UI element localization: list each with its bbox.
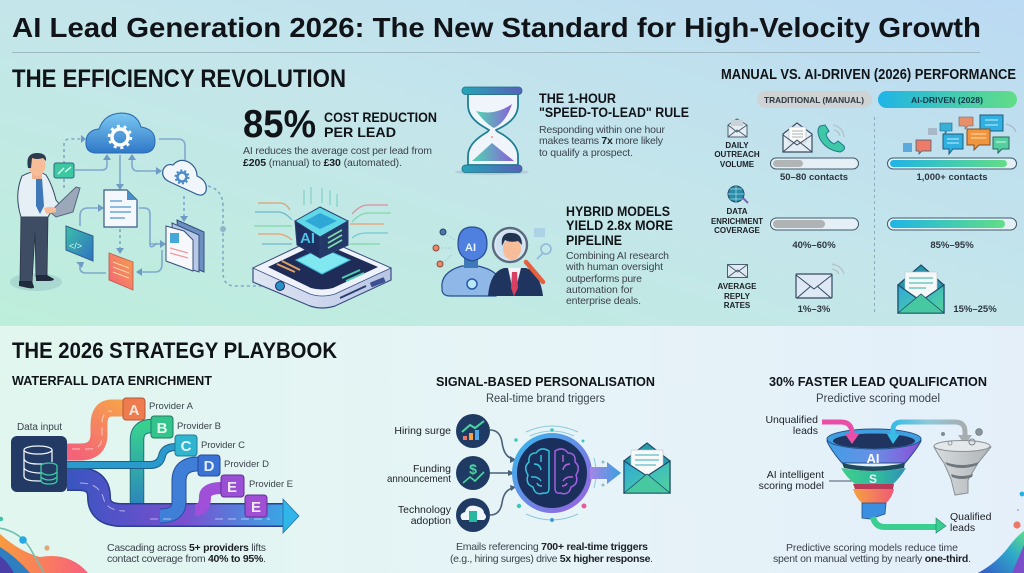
trigger labels [387,425,452,527]
row: data enrichment coverage: 40%–60% [792,240,836,251]
icon: AI and human hybrid [433,227,551,296]
row: average reply rates: REPLY [724,292,751,301]
document stack [177,220,204,272]
arrow: qualified leads [873,517,946,533]
row: average reply rates [718,264,997,315]
text: hybrid models: PIPELINE [566,233,622,248]
provider B: Provider B [177,421,221,432]
text: hybrid models: YIELD 2.8x MORE [566,218,673,233]
row: data enrichment coverage: COVERAGE [714,226,761,235]
text: hybrid models: HYBRID MODELS [566,204,670,219]
label: qualified leads [950,511,992,534]
funnel: S [869,472,877,486]
stat: 85% cost reduction: 85% [243,103,316,146]
title: AI Lead Generation 2026: The New Standard for High-Velocity Growth [12,12,981,43]
icon: funding [456,456,490,490]
heading: the 2026 strategy playbook: THE 2026 STRATEGY PLAYBOOK [12,338,338,363]
icon: technology adoption [456,498,490,532]
trigger labels: announcement [387,473,451,485]
funnel [827,429,921,519]
caption [450,541,653,565]
icon: email [624,443,670,493]
text: speed-to-lead rule [539,91,689,159]
row: daily outreach volume: 50–80 contacts [780,172,848,183]
row: daily outreach volume [714,115,1016,183]
panel: faster lead qualification: Predictive scoring model [816,393,940,405]
big cloud [86,113,155,153]
row: average reply rates: 1%–3% [798,304,831,315]
labels: scoring model [759,480,824,492]
stat: 85% cost reduction: £205 (manual) to £30 (automated). [243,157,402,169]
panel: signal-based personalisation [387,374,670,565]
panel: signal-based personalisation: Real-time brand triggers [486,393,605,405]
label: qualified leads: leads [950,522,975,534]
icon: funding: $ [469,461,477,477]
provider A: Provider A [149,401,194,412]
labels: AI intelligent [767,469,824,481]
provider E tag two [245,495,267,517]
provider E [221,475,293,497]
provider C [175,435,245,456]
text: hybrid models: with human oversight [565,261,663,273]
row: data enrichment coverage: DATA [726,207,748,216]
pipeline diagram [67,408,285,519]
green chip [54,163,74,178]
pill: traditional: TRADITIONAL (MANUAL) [764,95,864,105]
pill: AI-driven [878,91,1017,108]
labels: leads [793,425,818,437]
row: daily outreach volume: VOLUME [720,160,755,169]
row: daily outreach volume: OUTREACH [714,150,760,159]
caption: contact coverage from 40% to 95%. [107,553,266,565]
provider A: A [129,402,140,419]
arrow: loop to discard funnel [893,422,965,436]
connecting arrows [490,430,514,515]
heading: lead qualification: 30% FASTER LEAD QUALIFICATION [769,374,987,389]
provider B: B [157,420,168,437]
text: speed-to-lead rule: to qualify a prospect. [539,147,633,159]
stat: 85% cost reduction: COST REDUCTION [324,109,437,125]
trigger labels: adoption [411,515,451,527]
label: qualified leads: Qualified [950,511,992,523]
decoration: bottom right wave [978,492,1024,573]
data input [11,422,67,492]
code card [66,226,93,261]
trigger labels: Funding [413,463,451,475]
arrow: unqualified leads [822,422,852,435]
labels [759,414,824,492]
heading: the efficiency revolution: THE EFFICIENCY REVOLUTION [12,65,346,93]
provider E tag two: E [251,499,261,516]
pill: AI-driven: AI-DRIVEN (2028) [911,95,983,105]
person [10,273,62,291]
text: hybrid models: outperforms pure [566,273,642,285]
stat: 85% cost reduction: PER LEAD [324,124,396,140]
small cloud [163,160,206,195]
arrow: brain to email [590,462,621,484]
icon: hourglass [455,87,529,175]
provider A [123,398,194,420]
icon: hiring surge [456,414,490,448]
illustration: person and cloud workflow: </> [69,241,82,251]
caption [107,542,266,565]
pill: traditional [757,91,872,108]
text: speed-to-lead rule: makes teams 7x more likely [539,135,664,147]
row: average reply rates: RATES [724,301,751,310]
top background panel [0,0,1024,327]
provider B [151,416,221,438]
funnel: AI [866,451,880,466]
provider C: Provider C [201,440,245,451]
heading: signal-based: SIGNAL-BASED PERSONALISATION [436,374,655,389]
provider E: Provider E [249,479,293,490]
text: hybrid models: Combining AI research [566,250,669,262]
row: daily outreach volume: 1,000+ contacts [916,172,988,183]
provider D [198,455,269,476]
labels: Unqualified [765,414,818,426]
row: average reply rates: 15%–25% [953,304,997,315]
row: daily outreach volume: DAILY [725,141,749,150]
document [104,190,137,227]
row: average reply rates: AVERAGE [718,282,757,291]
caption [773,542,971,565]
text: speed-to-lead rule: THE 1-HOUR [539,91,616,106]
panel: faster lead qualification [759,374,992,565]
caption: Predictive scoring models reduce time [786,542,958,554]
trigger labels: Technology [398,504,452,516]
text: hybrid models: enterprise deals. [566,295,641,307]
illustration: AI chip on platform [253,187,391,308]
caption: Cascading across 5+ providers lifts [107,542,266,554]
heading: waterfall: WATERFALL DATA ENRICHMENT [12,373,212,388]
orange doc [109,253,133,290]
caption: (e.g., hiring surges) drive 5x higher response. [450,553,653,565]
trigger labels: Hiring surge [394,425,451,437]
text: hybrid models [565,204,673,307]
panel: waterfall data enrichment [11,373,299,565]
row: data enrichment coverage: 85%–95% [930,240,974,251]
data input: Data input [17,422,62,433]
bottom background panel [0,326,1024,573]
provider C: C [181,438,192,455]
decoration: bottom left wave [0,517,88,573]
provider D: Provider D [224,459,269,470]
text: speed-to-lead rule: "SPEED-TO-LEAD" RULE [539,105,689,120]
stat: 85% cost reduction: AI reduces the average cost per lead from [243,145,432,157]
illustration: AI chip on platform: AI [300,230,315,247]
gray funnel [934,429,991,495]
icon: AI brain circle [514,426,604,522]
arrow head [283,499,299,533]
arrow tips [508,456,516,491]
text: hybrid models: automation for [566,284,634,296]
icon: AI and human hybrid: AI [465,242,476,254]
illustration: person and cloud workflow [10,113,265,291]
stat: 85% cost reduction [243,103,437,169]
caption: Emails referencing 700+ real-time triggers [456,541,648,553]
text: speed-to-lead rule: Responding within one hour [539,124,666,136]
provider E: E [227,479,237,496]
row: data enrichment coverage: ENRICHMENT [711,217,763,226]
panel: manual vs AI performance [711,67,1017,315]
row: data enrichment coverage [711,186,1016,251]
provider D: D [204,458,215,475]
caption: spent on manual vetting by nearly one-third. [773,553,971,565]
